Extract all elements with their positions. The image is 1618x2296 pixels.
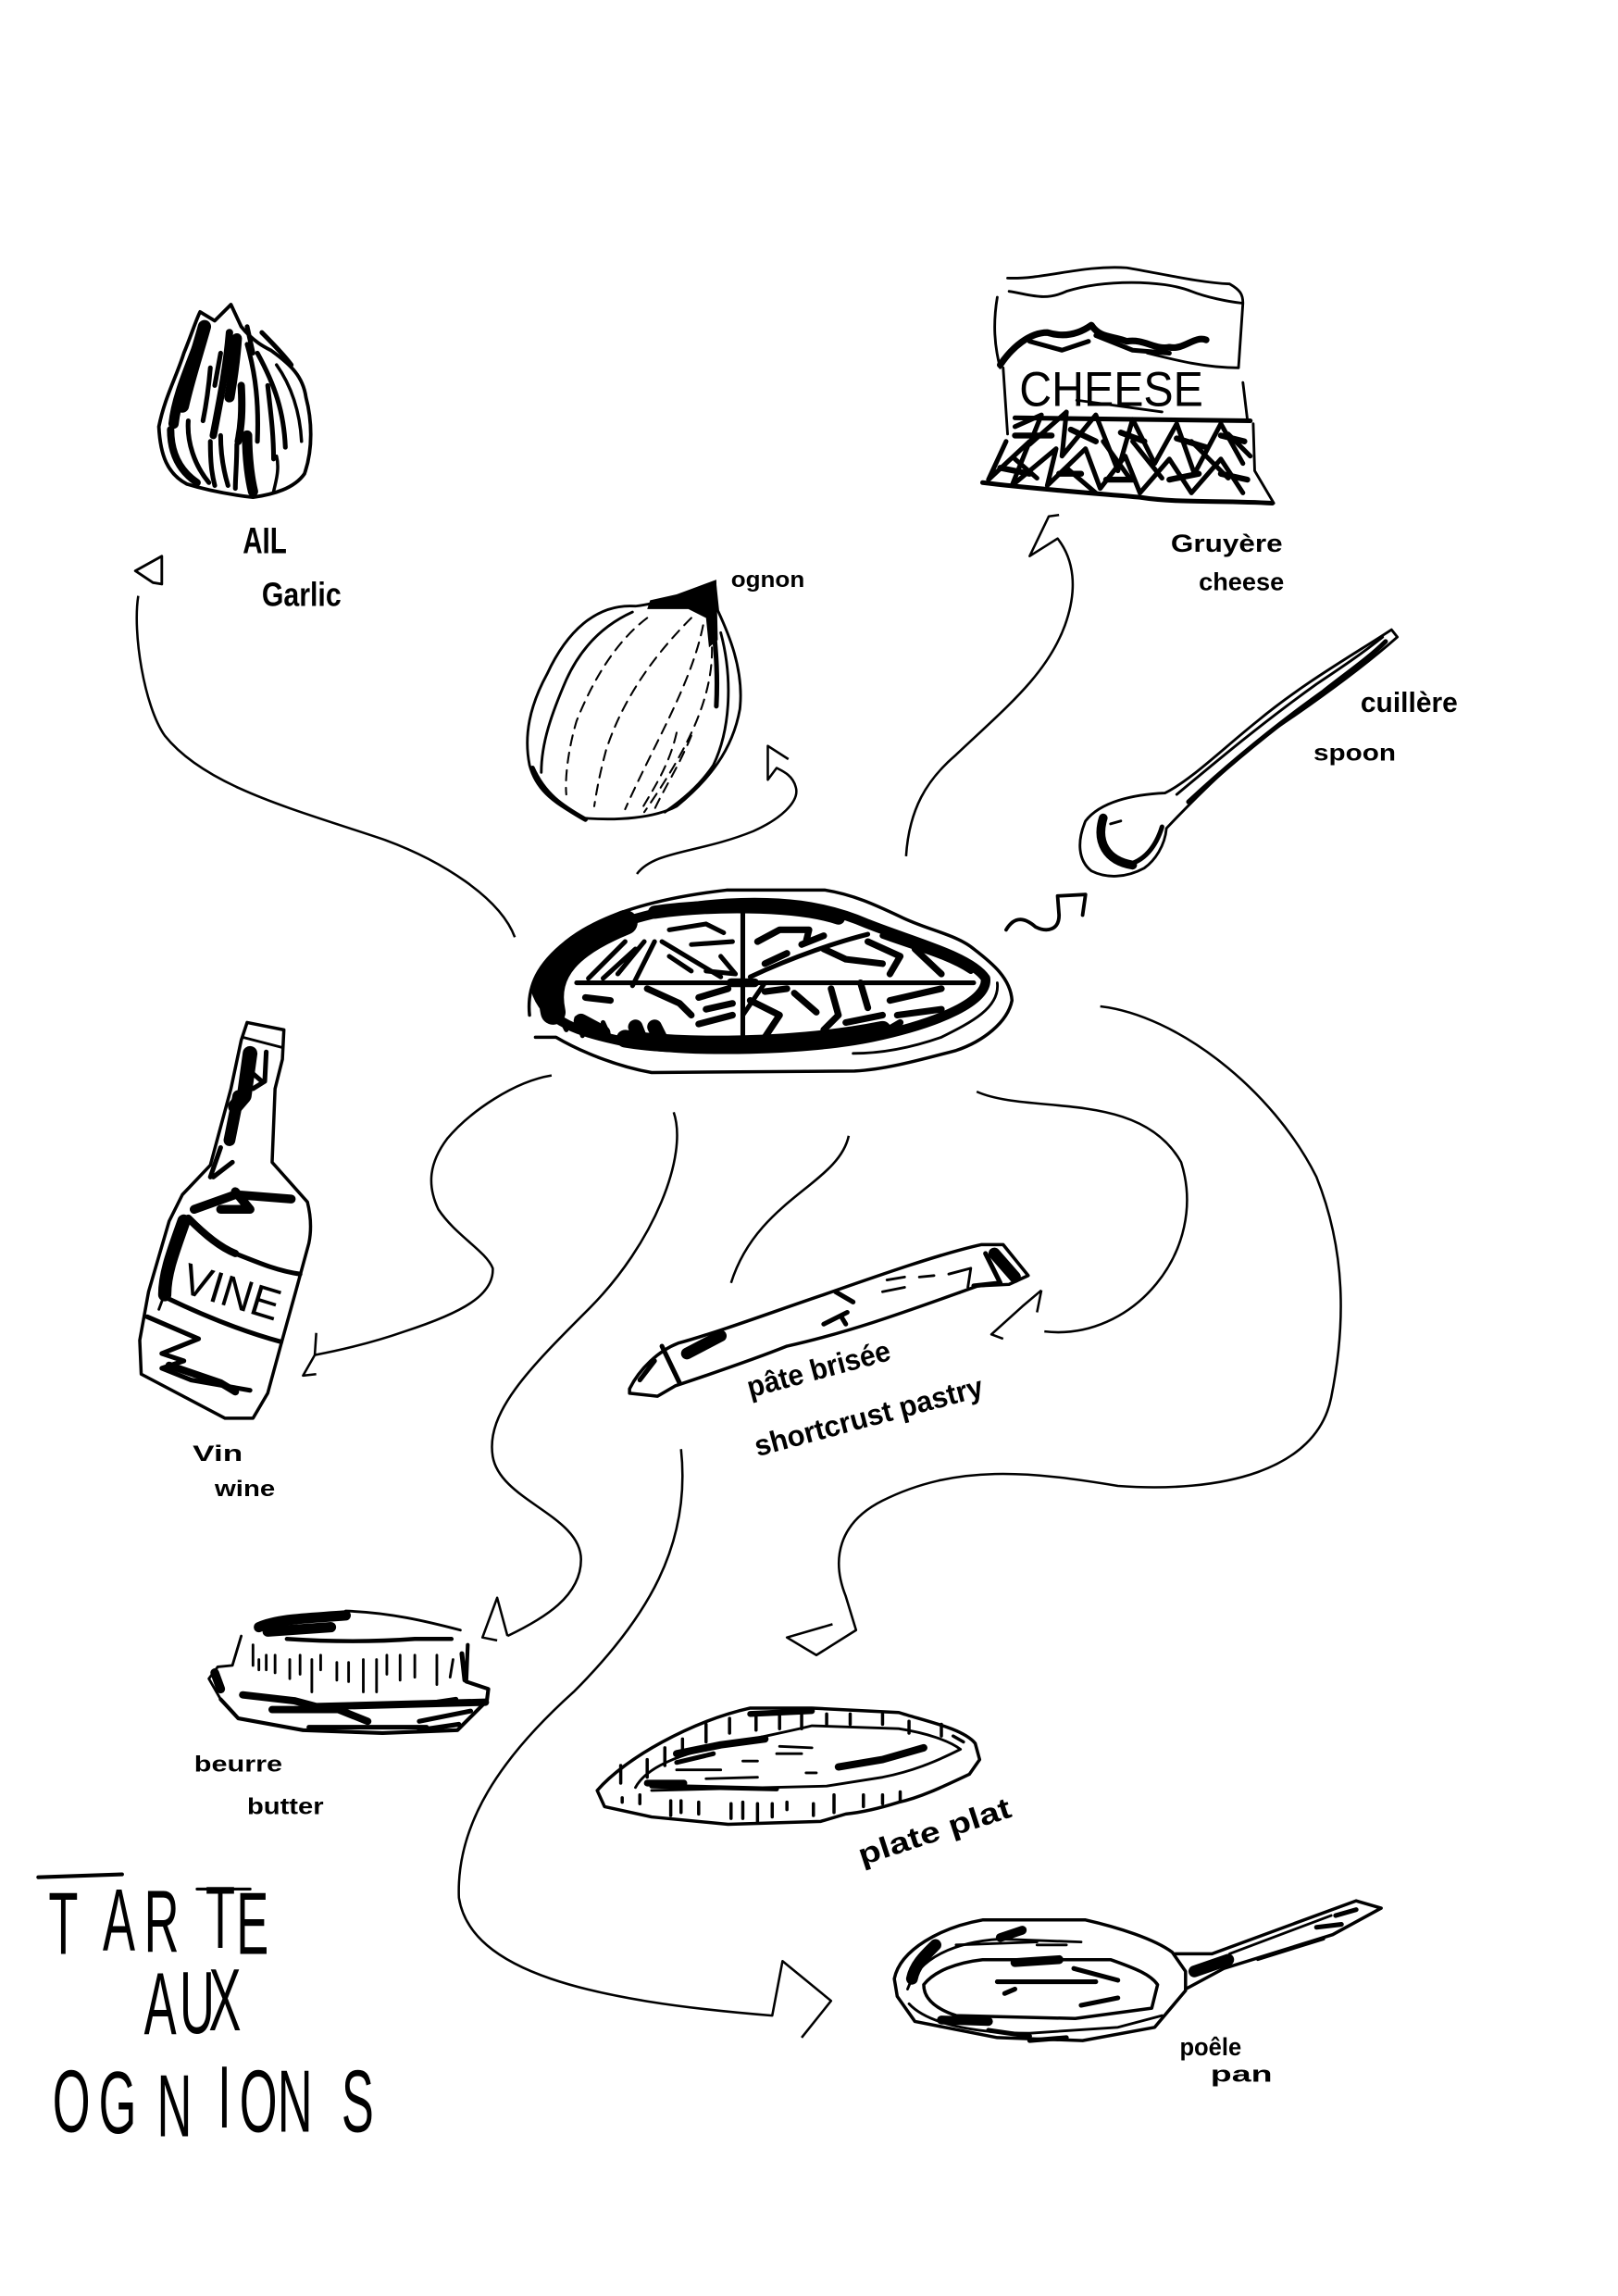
title: OGNIONS bbox=[53, 2048, 374, 2155]
title: AUX bbox=[144, 1951, 241, 2054]
arrow: to garlic bbox=[135, 556, 515, 937]
label: spoon: spoon bbox=[1313, 741, 1396, 767]
label: shortcrust pastry: shortcrust pastry bbox=[751, 1369, 987, 1463]
tart filling bbox=[589, 942, 644, 979]
tart dish rim bbox=[529, 890, 1012, 1072]
label: spoon bbox=[1313, 688, 1458, 767]
icon: garlic bbox=[159, 305, 311, 497]
icon: butter bbox=[209, 1611, 489, 1733]
label: wine bbox=[193, 1441, 275, 1502]
label: pan bbox=[1179, 2033, 1273, 2088]
arrow: to spoon bbox=[1006, 894, 1086, 930]
label band bbox=[188, 1218, 235, 1254]
label: garlic: Garlic bbox=[262, 576, 342, 614]
label: pan: pan bbox=[1211, 2063, 1273, 2088]
crust ring bbox=[535, 903, 986, 1049]
icon: spoon bbox=[1080, 630, 1398, 876]
label: gruyere cheese bbox=[1171, 530, 1284, 595]
icon: frying pan bbox=[894, 1901, 1381, 2040]
label: butter bbox=[194, 1752, 324, 1819]
label: wine: Vin bbox=[193, 1441, 243, 1466]
arrow: to butter bbox=[482, 1112, 677, 1641]
label: butter: beurre bbox=[194, 1752, 282, 1777]
icon: shortcrust pastry roll bbox=[629, 1244, 1028, 1396]
label: gruyere cheese: Gruyère bbox=[1171, 530, 1283, 557]
arrow: to pastry right bbox=[977, 1092, 1187, 1339]
pan handle bbox=[1176, 1901, 1381, 1989]
label: shortcrust pastry: pâte brisée bbox=[743, 1334, 894, 1404]
icon: cheese bag bbox=[983, 268, 1274, 504]
label: pan: poêle bbox=[1179, 2033, 1241, 2061]
label: wine: wine bbox=[214, 1477, 275, 1502]
arrow: to cheese bbox=[906, 515, 1073, 856]
icon: onion tart bbox=[529, 890, 1012, 1072]
label: shortcrust pastry bbox=[743, 1334, 987, 1463]
label: gruyere cheese: cheese bbox=[1199, 568, 1284, 595]
arrow: to plate bbox=[787, 1006, 1341, 1655]
label: plate: plate plat bbox=[853, 1791, 1015, 1872]
label: butter: butter bbox=[247, 1793, 324, 1819]
bottle word: VINE bbox=[177, 1254, 286, 1330]
label: garlic bbox=[243, 521, 342, 614]
cheese word: CHEESE bbox=[1019, 364, 1203, 418]
slice cuts bbox=[741, 912, 744, 1039]
icon: tart plate bbox=[597, 1708, 979, 1825]
butter dish bbox=[243, 1695, 485, 1706]
plate rim ticks bbox=[622, 1792, 901, 1821]
butter ridges bbox=[253, 1645, 453, 1691]
arrow: to pastry left bbox=[731, 1136, 849, 1283]
label: spoon: cuillère bbox=[1361, 688, 1458, 718]
icon: wine bottle bbox=[140, 1022, 310, 1418]
title bbox=[38, 1868, 374, 2155]
arrow: to pan bbox=[459, 1449, 831, 2038]
icon: onion bbox=[528, 580, 741, 819]
label: garlic: AIL bbox=[243, 521, 287, 562]
bottle lower scribble bbox=[147, 1316, 250, 1391]
arrow: to wine bbox=[303, 1076, 552, 1376]
label: onion: ognon bbox=[731, 568, 804, 593]
arrow: to onion bbox=[637, 746, 796, 874]
title: TARTE bbox=[48, 1868, 268, 1973]
